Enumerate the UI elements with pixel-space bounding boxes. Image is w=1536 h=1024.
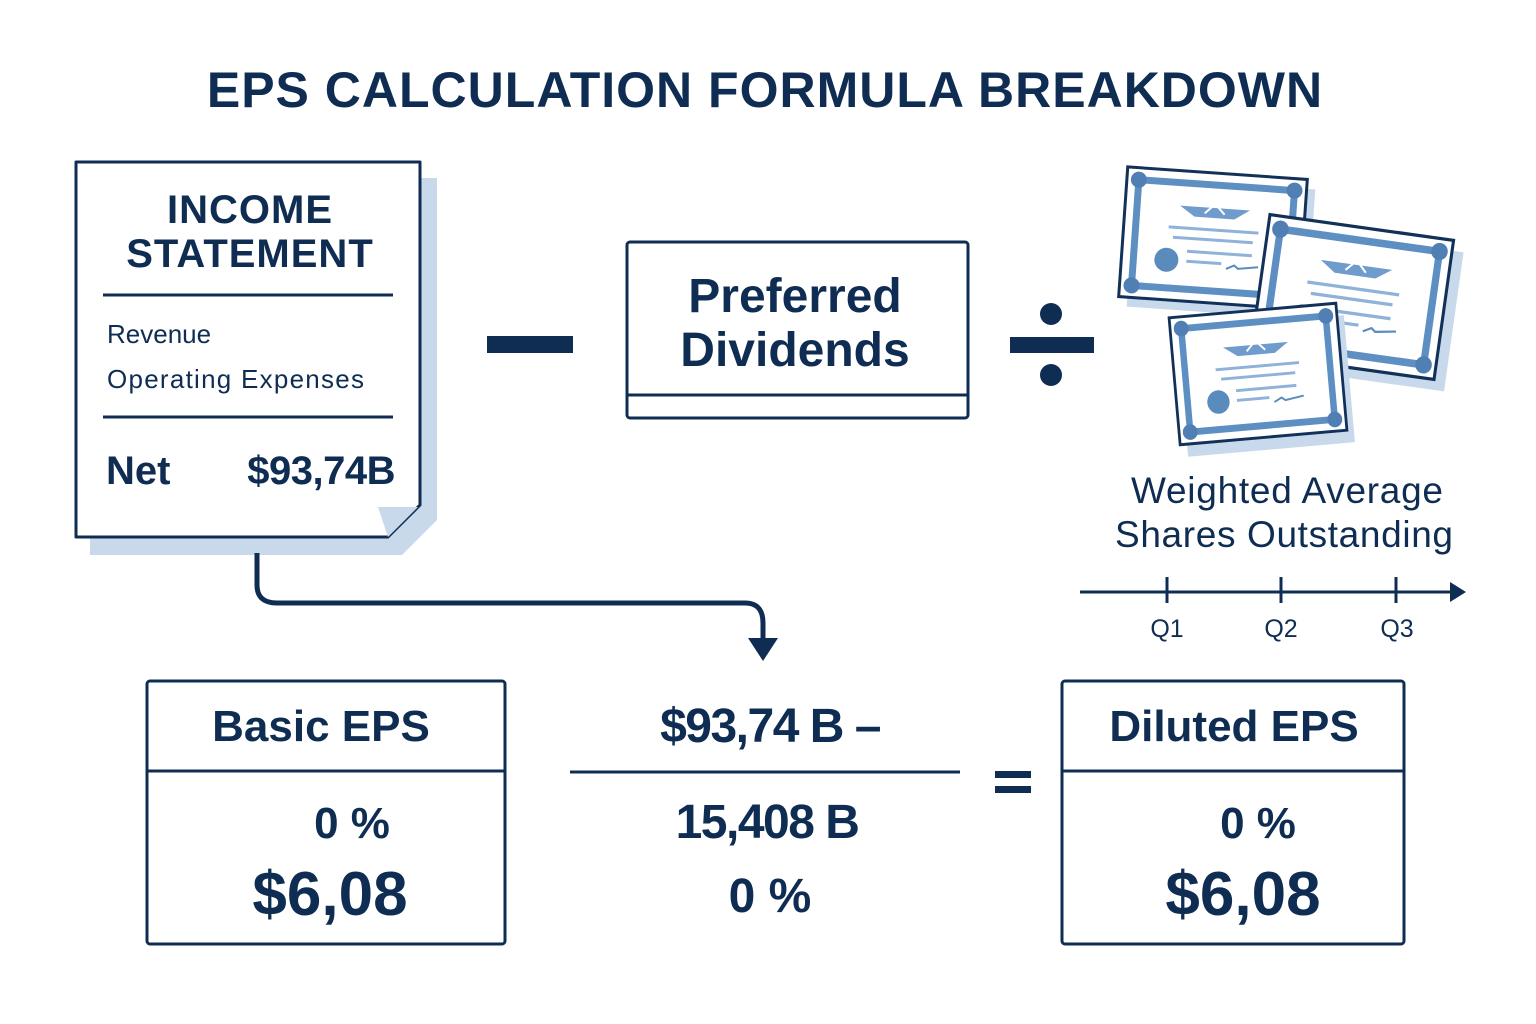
panel: income statement: STATEMENT (126, 232, 374, 276)
panel: income statement: $93,74B (247, 449, 395, 493)
panel: preferred dividends (627, 242, 968, 418)
panel: income statement: Revenue (107, 319, 211, 349)
timeline: Q2 (1264, 615, 1298, 643)
timeline (1080, 577, 1466, 643)
arrow: net income to formula (257, 553, 778, 661)
timeline: Q3 (1380, 615, 1414, 643)
panel: basic EPS: Basic EPS (212, 702, 430, 751)
title: EPS CALCULATION FORMULA BREAKDOWN (207, 62, 1323, 118)
formula: fraction (570, 700, 960, 923)
panel: basic EPS: $6,08 (252, 860, 408, 929)
panel: diluted EPS: $6,08 (1165, 860, 1321, 929)
panel: diluted EPS (1062, 681, 1404, 944)
panel: basic EPS (147, 681, 505, 944)
panel: preferred dividends: Dividends (680, 324, 910, 377)
minus sign (487, 336, 573, 353)
panel: income statement: Operating Expenses (107, 364, 364, 394)
division sign (1010, 303, 1094, 386)
panel: income statement: Net (106, 449, 170, 493)
formula: fraction: 15,408 B (676, 796, 858, 849)
text: weighted average shares: Shares Outstanding (1115, 514, 1453, 555)
panel: diluted EPS: Diluted EPS (1109, 702, 1359, 751)
equals sign (995, 771, 1031, 793)
text: weighted average shares: Weighted Average (1131, 470, 1443, 511)
panel: diluted EPS: 0 % (1220, 799, 1296, 848)
panel: income statement: INCOME (167, 188, 333, 232)
timeline: Q1 (1150, 615, 1184, 643)
panel: income statement (76, 162, 437, 555)
formula: fraction: $93,74 B – (660, 700, 881, 753)
text: weighted average shares (1115, 470, 1453, 555)
panel: preferred dividends: Preferred (688, 270, 902, 323)
panel: basic EPS: 0 % (314, 799, 390, 848)
formula: fraction: 0 % (729, 870, 811, 923)
icon: share certificates (1119, 167, 1464, 457)
